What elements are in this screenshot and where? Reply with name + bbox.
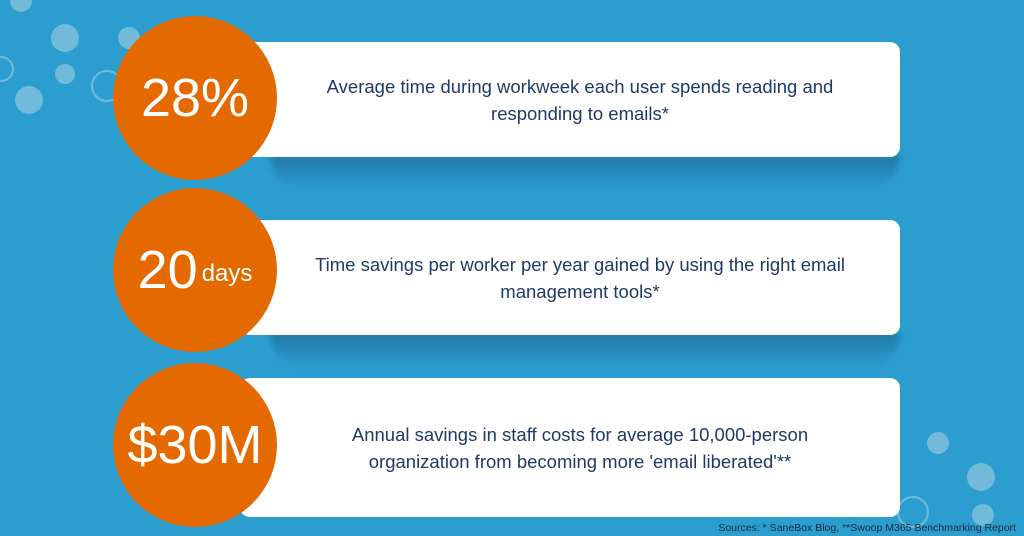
card 1 (240, 42, 900, 157)
card 3: Annual savings in staff costs for average 10,000-person (352, 424, 808, 444)
circle: 28% (113, 16, 277, 180)
shadows (270, 155, 900, 189)
card 3 (240, 378, 900, 517)
sources: Sources: * SaneBox Blog, **Swoop M365 Benchmarking Report (718, 522, 1016, 534)
circle: 20 days: 20 (138, 240, 198, 300)
circle: 20 days (113, 188, 277, 352)
circle: $30M (113, 363, 277, 527)
card 2: Time savings per worker per year gained by using the right email (315, 254, 845, 274)
card 1: Average time during workweek each user spends reading and (327, 76, 833, 96)
card 3: organization from becoming more 'email liberated'** (369, 450, 791, 472)
card 2 (240, 220, 900, 335)
circle: 20 days: days (202, 260, 252, 287)
circle: 28%: 28% (141, 68, 249, 128)
card 1: responding to emails* (491, 102, 669, 124)
card 2: management tools* (500, 280, 660, 302)
circle: $30M: $30M (127, 415, 263, 475)
